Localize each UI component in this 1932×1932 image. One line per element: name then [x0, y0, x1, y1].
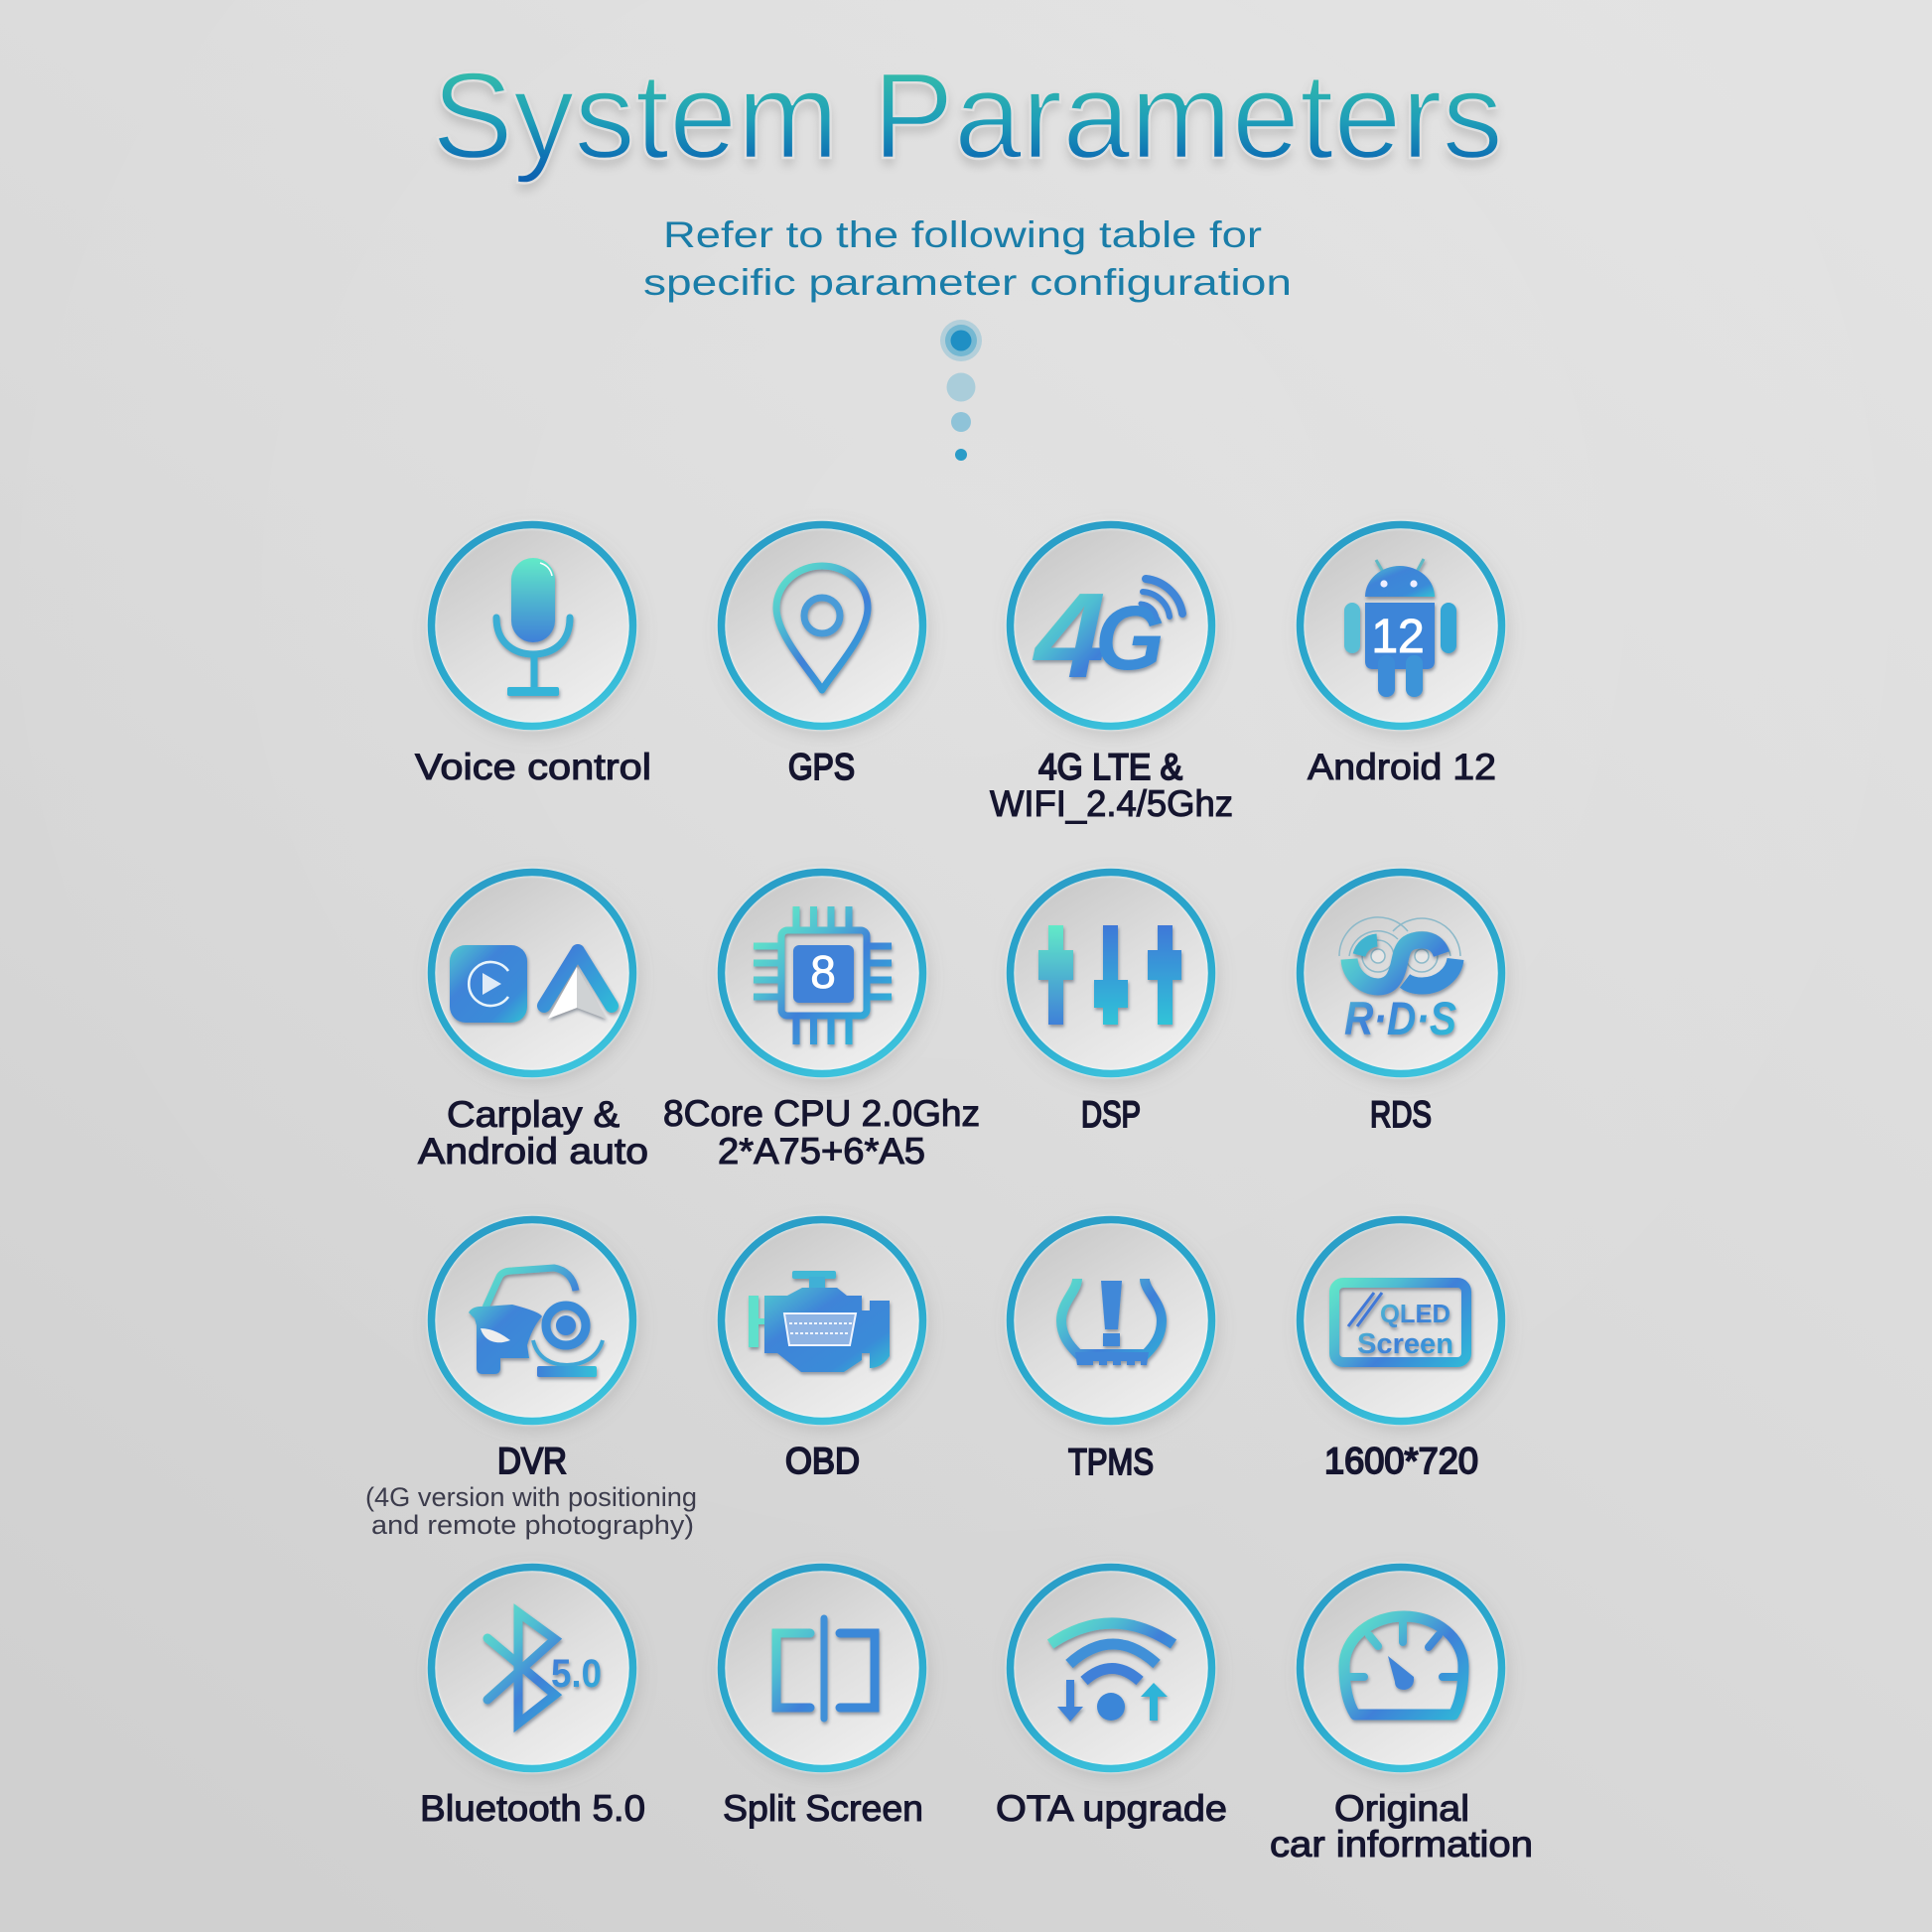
item: RDS [1301, 872, 1501, 1135]
label: WIFI_2.4/5Ghz [990, 783, 1233, 824]
icon: android robot: 12 [1371, 611, 1425, 663]
label: OTA upgrade [996, 1788, 1227, 1829]
item: OBD [721, 1219, 923, 1481]
icon: sliders [1011, 872, 1211, 1074]
label: and remote photography) [371, 1510, 694, 1540]
item: split screen [721, 1567, 923, 1829]
item: DSP [1011, 872, 1211, 1135]
icon: carplay and android auto [431, 872, 633, 1074]
item: car information [1270, 1567, 1533, 1864]
icon: speedometer [1301, 1567, 1501, 1769]
icon: QLED screen: Screen [1357, 1328, 1453, 1360]
label: RDS [1370, 1094, 1432, 1135]
item: resolution [1301, 1219, 1501, 1481]
icon: bluetooth [431, 1567, 633, 1769]
item: TPMS [1011, 1219, 1211, 1482]
icon: 4G signal: G [1095, 588, 1165, 689]
label [990, 747, 1233, 824]
icon: split screen [721, 1567, 923, 1769]
icon: tire pressure [1011, 1219, 1211, 1422]
title: System Parameters [432, 56, 1503, 192]
item: CPU [663, 872, 980, 1172]
label: Bluetooth 5.0 [420, 1788, 645, 1829]
icon: location pin [721, 524, 923, 727]
subtitle: specific parameter configuration [643, 262, 1292, 303]
item: voice control [415, 524, 651, 787]
label: 4G LTE & [1038, 747, 1182, 787]
label: TPMS [1068, 1442, 1154, 1482]
label [365, 1441, 697, 1540]
icon: RDS logo [1301, 872, 1501, 1074]
icon: chip [721, 872, 923, 1074]
icon: car with dash camera [431, 1219, 633, 1422]
icon: wifi with arrows [1011, 1567, 1211, 1769]
label: Android auto [418, 1131, 648, 1172]
label: 1600*720 [1324, 1441, 1478, 1481]
icon: microphone [431, 524, 633, 727]
item: GPS [721, 524, 923, 787]
item: OTA [996, 1567, 1227, 1829]
label [1270, 1788, 1533, 1864]
icon: QLED screen [1301, 1219, 1501, 1422]
icon: engine [721, 1219, 923, 1422]
label: 8Core CPU 2.0Ghz [663, 1093, 980, 1134]
icon: bluetooth: 5.0 [551, 1652, 602, 1696]
title: System Parameters [432, 49, 1503, 185]
label: Split Screen [723, 1788, 923, 1829]
subtitle: Refer to the following table for [663, 214, 1262, 255]
label: (4G version with positioning [365, 1482, 697, 1512]
icon: RDS logo: R·D·S [1344, 992, 1456, 1044]
label: Carplay & [447, 1094, 620, 1135]
label: Android 12 [1308, 747, 1496, 787]
label [663, 1093, 980, 1172]
label: Voice control [415, 747, 651, 787]
subtitle [643, 214, 1292, 303]
label: Original [1334, 1788, 1469, 1829]
label: DVR [497, 1441, 567, 1481]
label: OBD [785, 1441, 860, 1481]
item: 4G [990, 524, 1233, 824]
icon: 4G signal [1011, 524, 1211, 727]
item: Carplay [418, 872, 648, 1172]
label: GPS [788, 747, 855, 787]
item: Android 12 [1301, 524, 1501, 787]
label: 2*A75+6*A5 [718, 1131, 925, 1172]
item: DVR [365, 1219, 697, 1540]
label: car information [1270, 1824, 1533, 1864]
label: DSP [1081, 1094, 1141, 1135]
icon: 4G signal: 4 [1032, 568, 1106, 703]
icon: chip: 8 [810, 946, 836, 998]
icon: QLED screen: QLED [1380, 1299, 1450, 1328]
icon: android robot [1301, 524, 1501, 727]
item: Bluetooth [420, 1567, 645, 1829]
label [418, 1094, 648, 1172]
dots indicator [940, 320, 982, 461]
